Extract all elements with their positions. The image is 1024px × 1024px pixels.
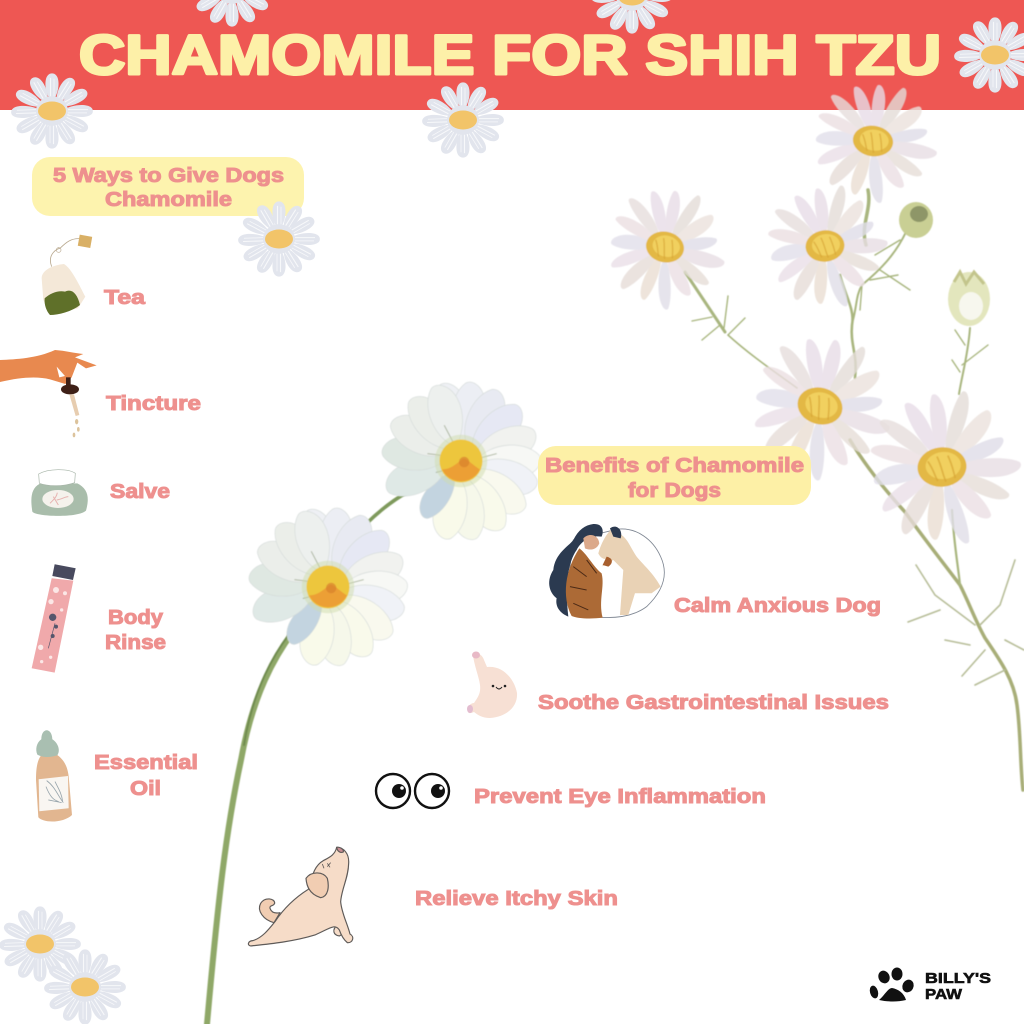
icon: smiling stomach — [467, 652, 517, 718]
benefit: relieve itchy skin: Relieve Itchy Skin — [415, 888, 618, 910]
icon: cartoon eyes — [376, 774, 449, 808]
daisy: top centre-left — [191, 0, 273, 27]
benefit: calm anxious dog: Calm Anxious Dog — [674, 595, 881, 617]
item: body rinse: Body — [108, 607, 164, 629]
pill heading: benefits: for Dogs — [628, 480, 721, 502]
pill heading: benefits: Benefits of Chamomile — [545, 455, 804, 477]
icon: tea bag — [42, 235, 92, 315]
pill heading: 5 ways — [32, 157, 304, 216]
chamomile flower C — [598, 178, 738, 321]
item: salve: Salve — [110, 481, 170, 503]
item: salve — [31, 470, 170, 516]
icon: woman hugging dog — [549, 524, 664, 618]
item: essential oil — [36, 730, 198, 822]
item: tincture: Tincture — [106, 393, 201, 415]
pill heading: 5 ways: 5 Ways to Give Dogs — [53, 165, 284, 187]
half-open bud G — [948, 272, 990, 326]
daisy: top centre-right — [591, 0, 673, 34]
item: tincture — [0, 350, 201, 437]
title: CHAMOMILE FOR SHIH TZU — [79, 23, 941, 86]
item: body rinse: Rinse — [105, 632, 166, 654]
chamomile flower A — [806, 75, 946, 212]
header banner — [0, 0, 1024, 110]
daisy: bottom left lower — [44, 949, 126, 1024]
daisy: banner centre — [422, 82, 504, 158]
benefit: prevent eye inflammation: Prevent Eye Inflammation — [474, 786, 766, 808]
logo: Billy's Paw: PAW — [925, 986, 963, 1003]
item: tea — [42, 235, 146, 315]
item: essential oil: Essential — [94, 752, 198, 774]
logo: Billy's Paw — [868, 968, 991, 1003]
icon: stretching puppy — [248, 847, 353, 946]
icon: hand with dropper — [0, 350, 97, 437]
benefit: calm anxious dog — [549, 524, 881, 618]
item: essential oil: Oil — [130, 778, 161, 800]
big daisy upper — [380, 380, 542, 542]
daisy: bottom left upper — [0, 906, 81, 982]
icon: paw print — [868, 968, 916, 1002]
chamomile flower D — [737, 321, 909, 497]
big daisy lower — [247, 506, 409, 668]
icon: salve jar — [31, 470, 88, 516]
daisy: top right — [954, 17, 1024, 93]
watercolor chamomile plant — [598, 75, 1024, 790]
daisy: banner left — [11, 73, 93, 149]
benefit: prevent eye inflammation — [376, 774, 766, 808]
chamomile flower E — [864, 385, 1024, 553]
chamomile flower B — [762, 180, 894, 315]
item: body rinse — [32, 564, 166, 673]
benefit: soothe gastrointestinal — [467, 652, 889, 718]
plant stems — [685, 190, 1024, 790]
logo: Billy's Paw: BILLY'S — [925, 970, 991, 987]
benefit: relieve itchy skin — [248, 847, 618, 946]
closed bud F — [899, 202, 933, 238]
item: tea: Tea — [104, 287, 146, 309]
daisy: over pill — [238, 201, 320, 277]
benefit: soothe gastrointestinal: Soothe Gastrointestinal Issues — [538, 692, 889, 714]
benefits daisy stems — [207, 478, 437, 1024]
icon: oil bottle — [36, 730, 72, 822]
icon: rinse tube — [32, 564, 76, 673]
pill heading: benefits — [538, 446, 811, 505]
pill heading: 5 ways: Chamomile — [105, 189, 232, 211]
